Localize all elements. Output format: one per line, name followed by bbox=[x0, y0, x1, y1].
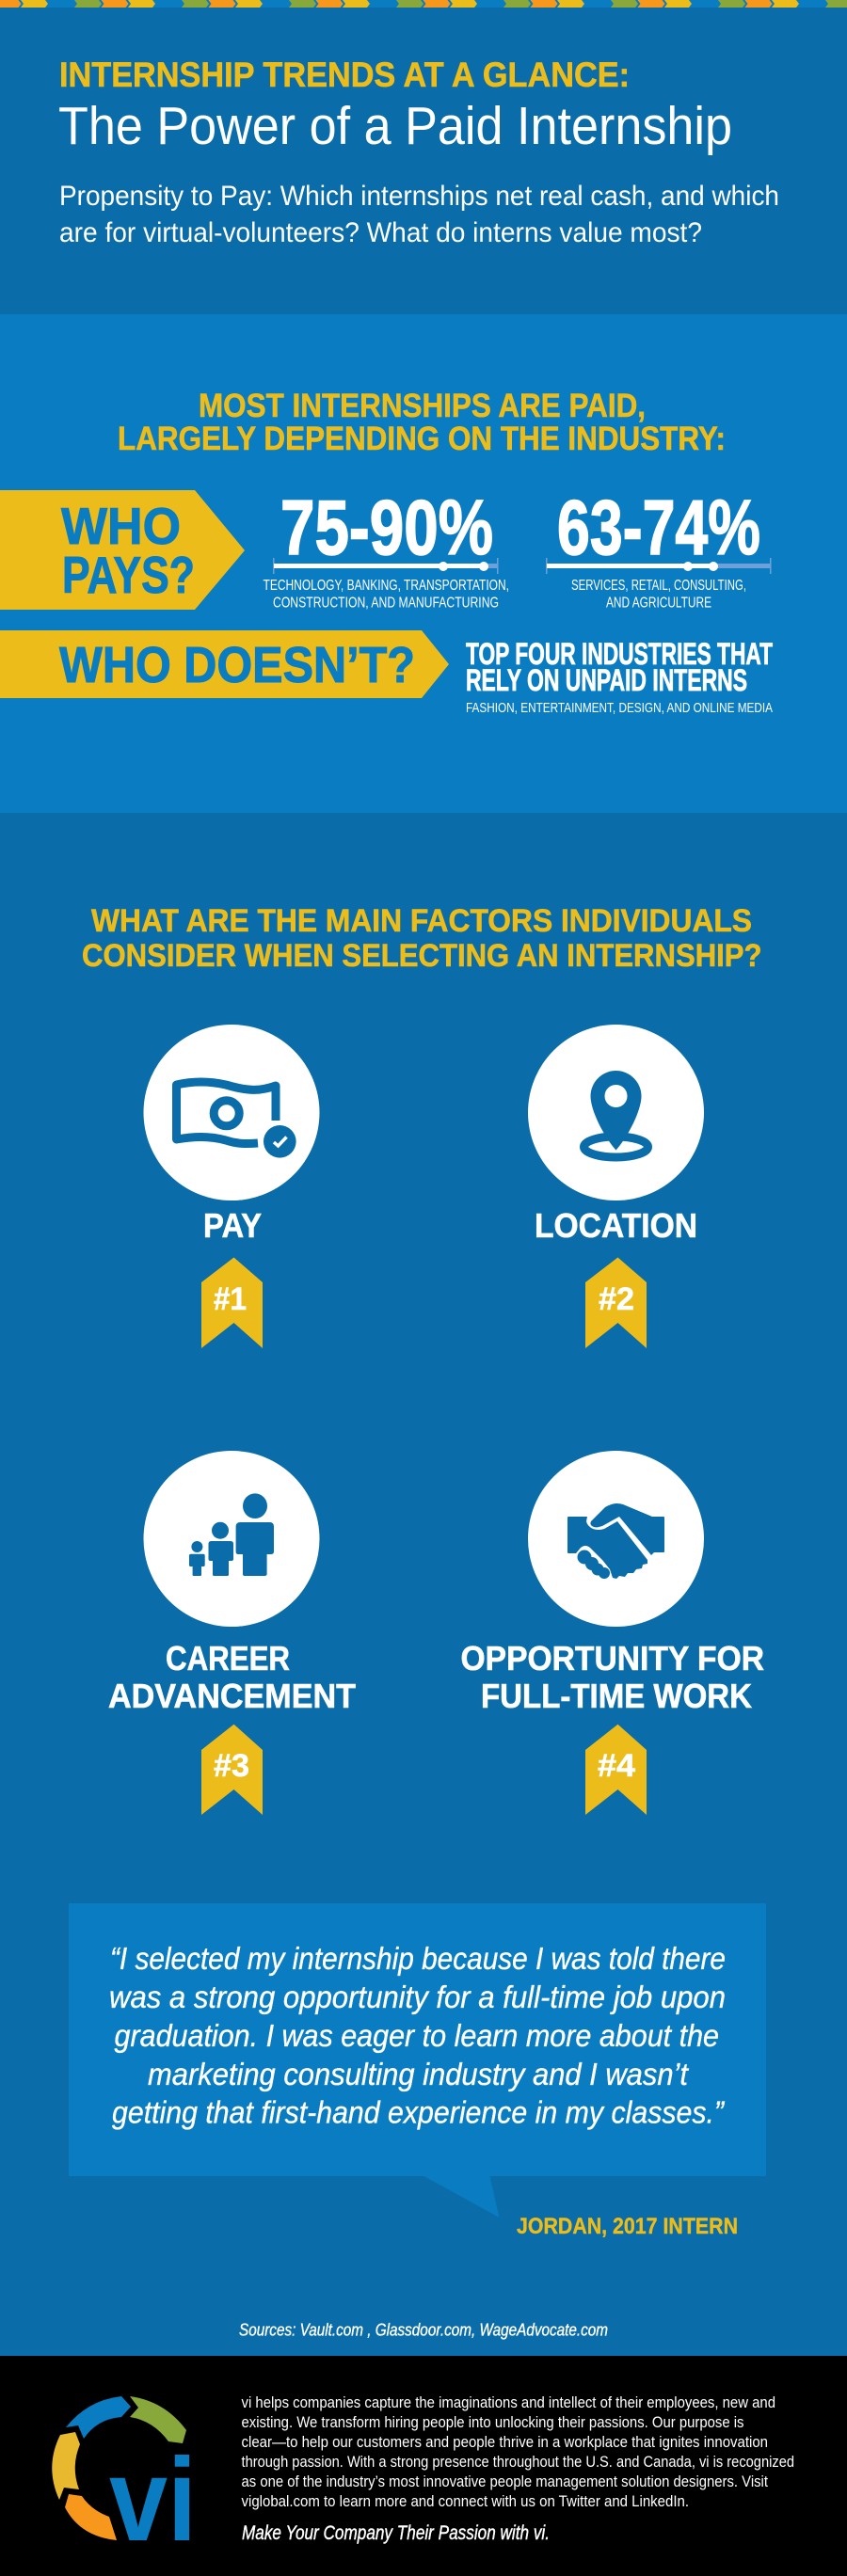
caption: services industries: AND AGRICULTURE bbox=[606, 595, 711, 612]
heading: main factors: CONSIDER WHEN SELECTING AN INTERNSHIP? bbox=[82, 938, 762, 974]
ribbon: rank 3: #3 bbox=[214, 1748, 249, 1784]
logo: vi: vi bbox=[109, 2435, 197, 2566]
text: unpaid industries bbox=[466, 637, 773, 716]
quote text: marketing consulting industry and I wasn’t bbox=[148, 2057, 690, 2091]
panel: footer bbox=[0, 2356, 847, 2576]
sources: Sources: Vault.com , Glassdoor.com, WageAdvocate.com bbox=[239, 2320, 608, 2339]
caption: services industries bbox=[571, 578, 746, 612]
callout: intern quote bbox=[69, 1903, 766, 2218]
ribbon: rank 4 bbox=[585, 1725, 647, 1815]
factor: location bbox=[528, 1025, 704, 1348]
caption: paying industries bbox=[264, 578, 509, 612]
quote text: getting that first-hand experience in my classes.” bbox=[112, 2094, 726, 2130]
about text bbox=[241, 2393, 794, 2510]
stat: 63-74% bbox=[546, 484, 772, 612]
quote text: “I selected my internship because I was told there bbox=[110, 1941, 726, 1976]
caption: paying industries: CONSTRUCTION, AND MANUFACTURING bbox=[273, 595, 499, 612]
quote text: graduation. I was eager to learn more about the bbox=[115, 2018, 719, 2053]
label: pay: PAY bbox=[203, 1206, 262, 1245]
panel: who pays bbox=[0, 314, 847, 813]
icon: map pin bbox=[528, 1025, 704, 1201]
icon: growing people bbox=[143, 1451, 320, 1627]
quote text bbox=[109, 1941, 726, 2130]
text: unpaid industries: RELY ON UNPAID INTERNS bbox=[466, 663, 747, 697]
ribbon: rank 3 bbox=[201, 1725, 263, 1815]
ribbon: rank 1 bbox=[201, 1257, 263, 1348]
arrow: who pays: WHO bbox=[61, 497, 181, 555]
arrow: who pays bbox=[0, 490, 245, 610]
stat: 75-90%: 75-90% bbox=[280, 484, 493, 571]
label: location: LOCATION bbox=[535, 1206, 697, 1245]
heading: most internships are paid: LARGELY DEPENDING ON THE INDUSTRY: bbox=[118, 421, 726, 457]
ribbon: rank 1: #1 bbox=[214, 1281, 247, 1317]
caption: paying industries: TECHNOLOGY, BANKING, TRANSPORTATION, bbox=[264, 578, 509, 594]
title: main: The Power of a Paid Internship bbox=[58, 96, 732, 156]
about text: as one of the industry’s most innovative people management solution designers. Visit bbox=[241, 2473, 768, 2490]
quote text: was a strong opportunity for a full-time job upon bbox=[109, 1980, 726, 2014]
about text: clear—to help our customers and people thrive in a workplace that ignites innovation bbox=[241, 2433, 768, 2451]
panel: main factors bbox=[0, 813, 847, 2356]
stat: 75-90% bbox=[264, 484, 509, 612]
heading: most internships are paid: MOST INTERNSHIPS ARE PAID, bbox=[199, 388, 646, 424]
label: opportunity for full-time work: OPPORTUNITY FOR bbox=[461, 1639, 764, 1678]
panel: header bbox=[0, 8, 847, 314]
caption: services industries: SERVICES, RETAIL, CONSULTING, bbox=[571, 578, 746, 594]
label: opportunity for full-time work bbox=[461, 1639, 764, 1715]
factor: full-time work bbox=[461, 1451, 764, 1815]
quote attribution: JORDAN, 2017 INTERN bbox=[517, 2214, 738, 2239]
intro text bbox=[59, 181, 779, 248]
stat: 63-74%: 63-74% bbox=[557, 484, 760, 571]
arrow: who doesn't: WHO DOESN’T? bbox=[59, 637, 415, 693]
tagline: Make Your Company Their Passion with vi. bbox=[242, 2522, 550, 2544]
heading: most internships are paid bbox=[118, 388, 726, 457]
heading: main factors bbox=[82, 903, 762, 974]
range slider: 63-74 bbox=[546, 558, 772, 574]
label: career advancement: CAREER bbox=[166, 1639, 290, 1678]
decorative chevron stripe bbox=[0, 0, 847, 8]
label: career advancement bbox=[108, 1639, 356, 1715]
intro text: are for virtual-volunteers? What do interns value most? bbox=[59, 217, 702, 248]
arrow: who pays: PAYS? bbox=[62, 546, 195, 604]
ribbon: rank 2: #2 bbox=[599, 1281, 634, 1317]
icon: handshake bbox=[528, 1451, 704, 1627]
factor: career advancement bbox=[108, 1451, 356, 1815]
about text: viglobal.com to learn more and connect with us on Twitter and LinkedIn. bbox=[241, 2492, 689, 2510]
factor: pay bbox=[143, 1025, 320, 1348]
text: unpaid industries: FASHION, ENTERTAINMENT, DESIGN, AND ONLINE MEDIA bbox=[466, 700, 773, 716]
intro text: Propensity to Pay: Which internships net real cash, and which bbox=[59, 181, 779, 212]
icon: money bill with check bbox=[143, 1025, 320, 1201]
about text: vi helps companies capture the imaginations and intellect of their employees, new and bbox=[241, 2393, 775, 2411]
logo: vi bbox=[52, 2396, 197, 2566]
heading: main factors: WHAT ARE THE MAIN FACTORS INDIVIDUALS bbox=[91, 903, 752, 939]
range slider: 75-90 bbox=[273, 558, 499, 574]
title: eyebrow: INTERNSHIP TRENDS AT A GLANCE: bbox=[59, 56, 630, 94]
ribbon: rank 4: #4 bbox=[598, 1748, 635, 1784]
label: opportunity for full-time work: FULL-TIME WORK bbox=[481, 1677, 752, 1715]
ribbon: rank 2 bbox=[585, 1257, 647, 1348]
label: career advancement: ADVANCEMENT bbox=[108, 1677, 356, 1715]
about text: existing. We transform hiring people into unlocking their passions. Our purpose is bbox=[241, 2413, 743, 2431]
